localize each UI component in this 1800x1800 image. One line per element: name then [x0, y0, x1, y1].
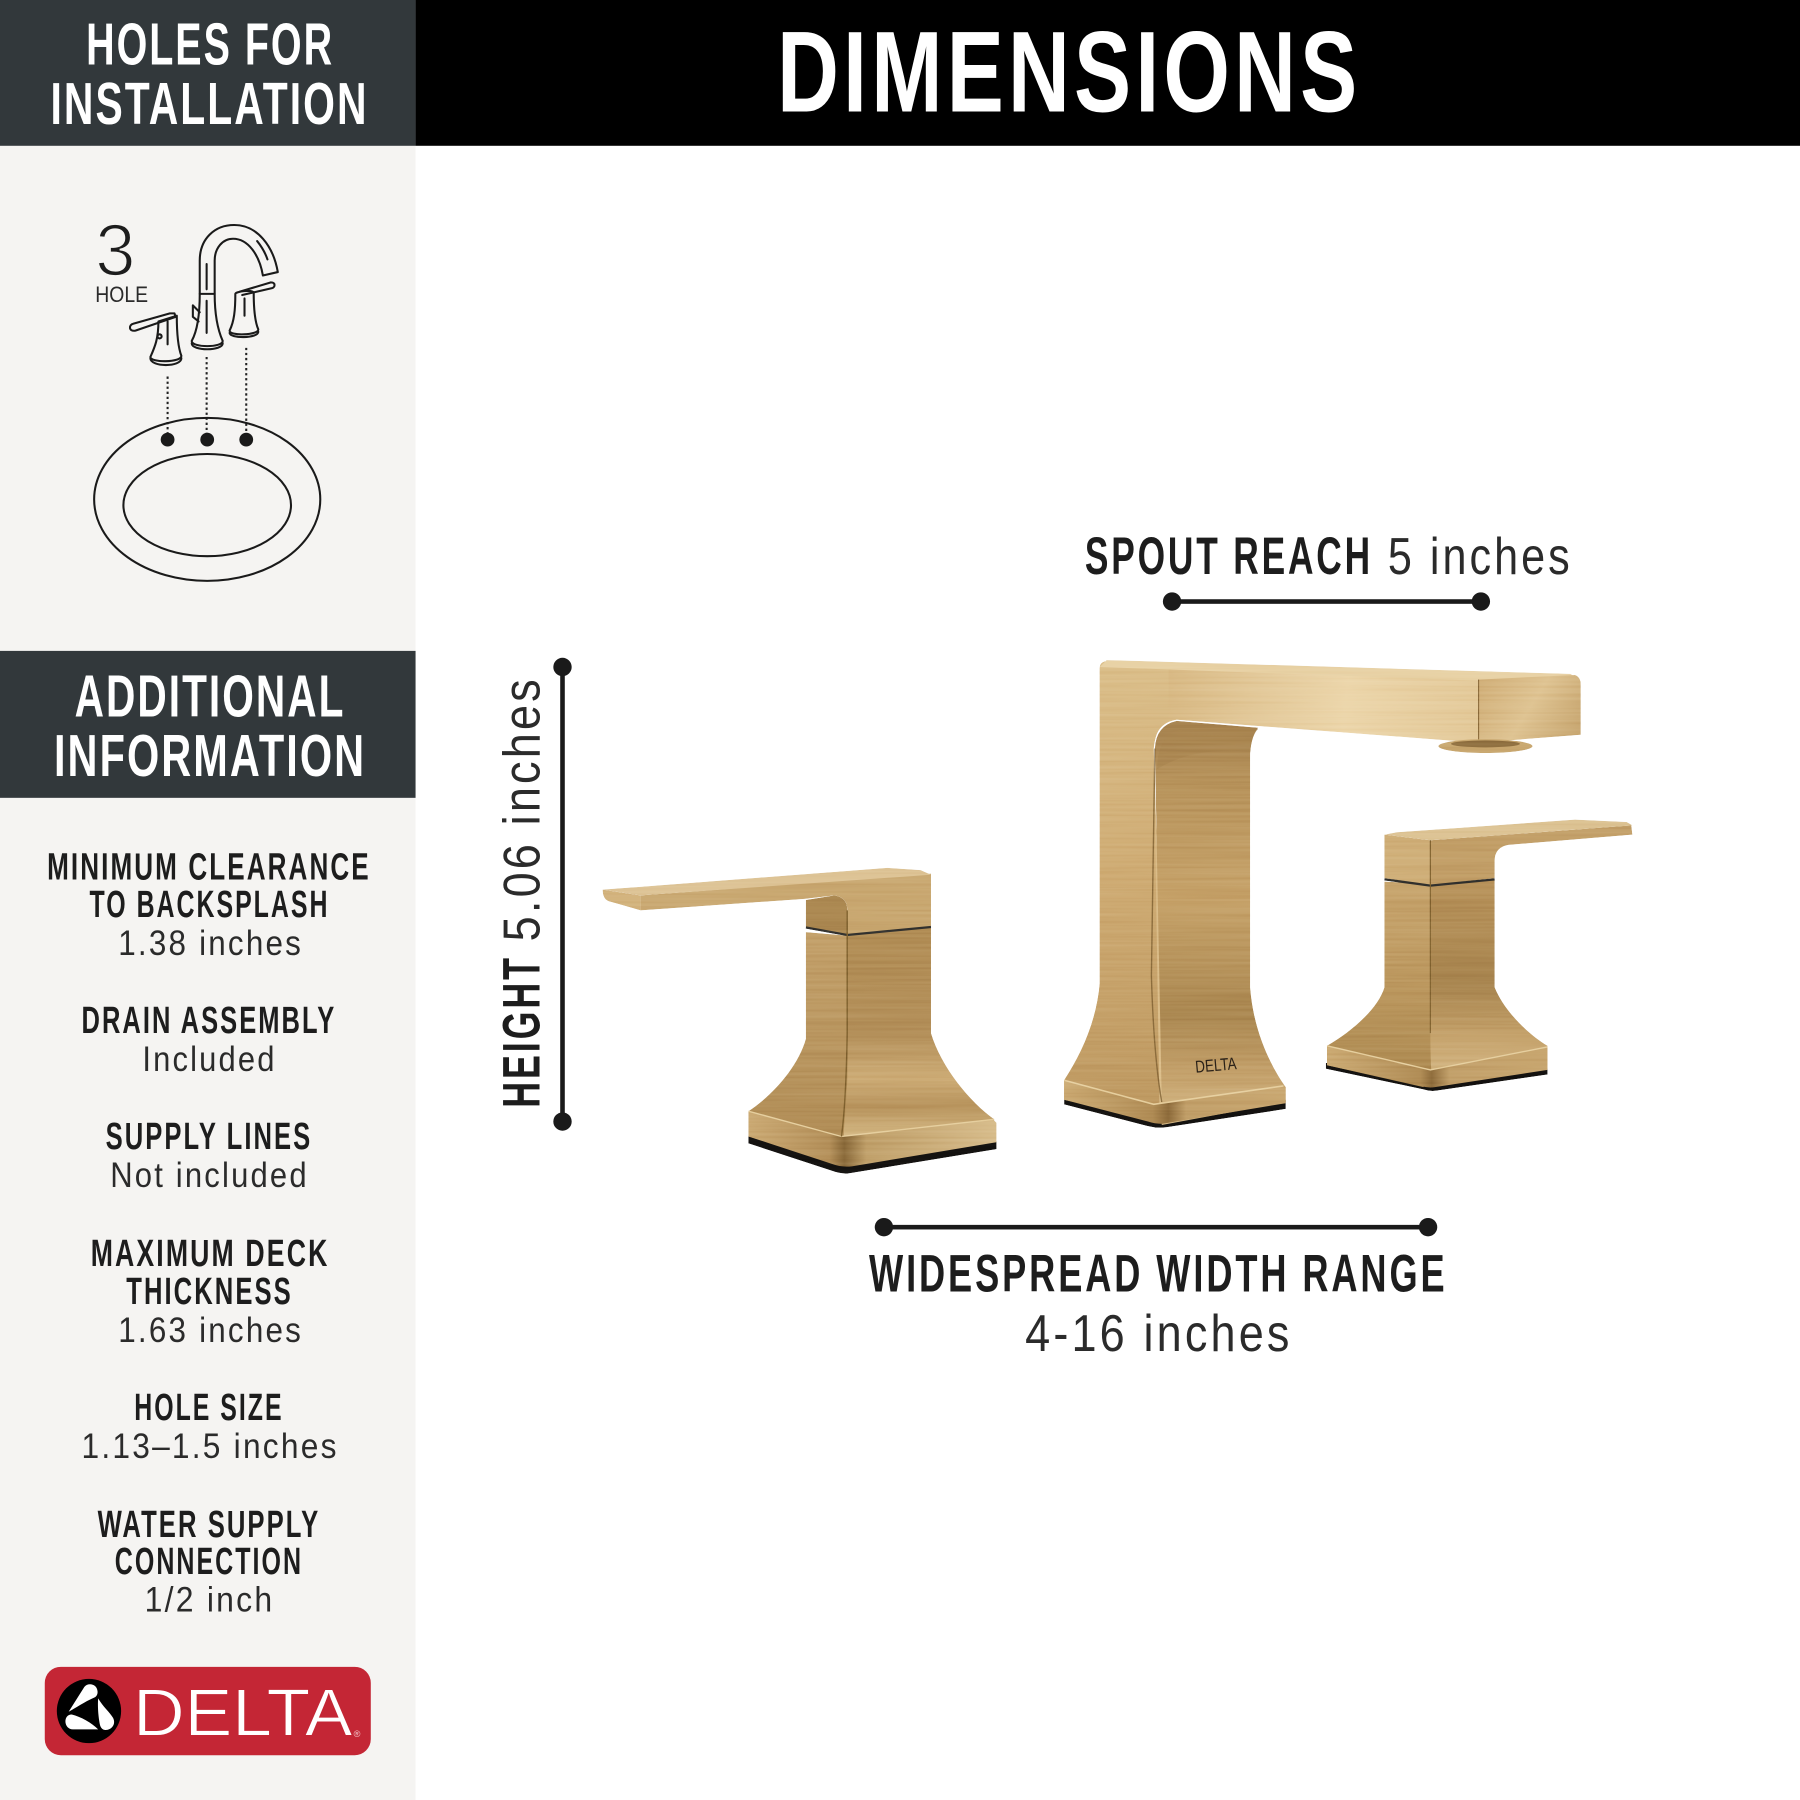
- heading: holes for installation: INSTALLATION: [51, 70, 368, 137]
- mounting holes: [161, 433, 253, 447]
- spec: drain assembly: DRAIN ASSEMBLY: [82, 1000, 336, 1042]
- dimension: widespread width range: 4-16 inches: [1025, 1304, 1293, 1362]
- logo: delta: ®: [354, 1729, 361, 1739]
- arrow: width span: [875, 1218, 1437, 1236]
- sink outline: [94, 418, 320, 581]
- spec: supply lines: [106, 1116, 312, 1195]
- spec: drain assembly: [82, 1000, 336, 1079]
- arrow: height span: [553, 658, 572, 1131]
- heading: additional information: [0, 651, 416, 798]
- dimension: height: [493, 658, 572, 1131]
- spec: supply lines: SUPPLY LINES: [106, 1116, 312, 1158]
- title banner: dimensions: [416, 0, 1800, 146]
- faucet: left handle: [603, 868, 996, 1174]
- dotted guides: [168, 348, 246, 434]
- dimension: widespread width range: WIDESPREAD WIDTH RANGE: [869, 1244, 1448, 1303]
- spec: hole size: HOLE SIZE: [134, 1387, 284, 1429]
- label: 3 hole: [95, 209, 148, 307]
- spec: minimum clearance: 1.38 inches: [118, 923, 303, 963]
- spec: minimum clearance: TO BACKSPLASH: [90, 884, 329, 926]
- logo: delta: [45, 1667, 371, 1755]
- icon: delta triangle mark: [57, 1679, 121, 1743]
- label: 3 hole: HOLE: [95, 282, 148, 307]
- spec: water supply connection: CONNECTION: [115, 1541, 303, 1583]
- dimension: spout reach: [1085, 527, 1573, 611]
- spec: maximum deck thickness: 1.63 inches: [118, 1310, 303, 1350]
- spec: water supply connection: 1/2 inch: [145, 1580, 274, 1620]
- arrow: spout reach span: [1163, 592, 1490, 611]
- logo: delta: DELTA: [133, 1677, 353, 1751]
- heading: holes for installation: [0, 0, 416, 146]
- spec: water supply connection: [98, 1504, 320, 1620]
- spec: drain assembly: Included: [142, 1039, 277, 1079]
- label: 3 hole: 3: [95, 209, 135, 292]
- text: DELTA engraved on spout base: DELTA: [1194, 1053, 1238, 1077]
- product image: gold widespread faucet: [603, 660, 1632, 1174]
- spec: maximum deck thickness: [91, 1233, 329, 1350]
- spec: minimum clearance: MINIMUM CLEARANCE: [47, 846, 371, 888]
- icon: left handle line art: [130, 313, 181, 365]
- dimension: height: 5.06 inches: [493, 676, 551, 941]
- dimension: spout reach: 5 inches: [1388, 527, 1573, 585]
- icon: right handle line art: [230, 282, 275, 337]
- spec: water supply connection: WATER SUPPLY: [98, 1504, 320, 1546]
- faucet: right handle: [1326, 820, 1632, 1091]
- heading: holes for installation: HOLES FOR: [86, 10, 334, 77]
- panel: left sidebar background: [0, 0, 416, 1800]
- dimension: height: HEIGHT: [493, 955, 552, 1108]
- title: DIMENSIONS: [777, 8, 1361, 136]
- dimension: widespread width range: [869, 1218, 1448, 1362]
- spec: maximum deck thickness: THICKNESS: [126, 1271, 293, 1313]
- spec: maximum deck thickness: MAXIMUM DECK: [91, 1233, 329, 1275]
- spec: minimum clearance: [47, 846, 371, 963]
- dimension: spout reach: SPOUT REACH: [1085, 527, 1373, 586]
- icon: three-hole sink and faucet diagram: [94, 209, 320, 581]
- heading: additional information: INFORMATION: [54, 722, 366, 789]
- heading: additional information: ADDITIONAL: [75, 662, 346, 729]
- spec: hole size: 1.13–1.5 inches: [82, 1426, 339, 1466]
- icon: center spout line art: [192, 225, 278, 349]
- spec: supply lines: Not included: [110, 1155, 309, 1195]
- faucet: center spout: [1064, 660, 1581, 1128]
- spec: hole size: [82, 1387, 339, 1466]
